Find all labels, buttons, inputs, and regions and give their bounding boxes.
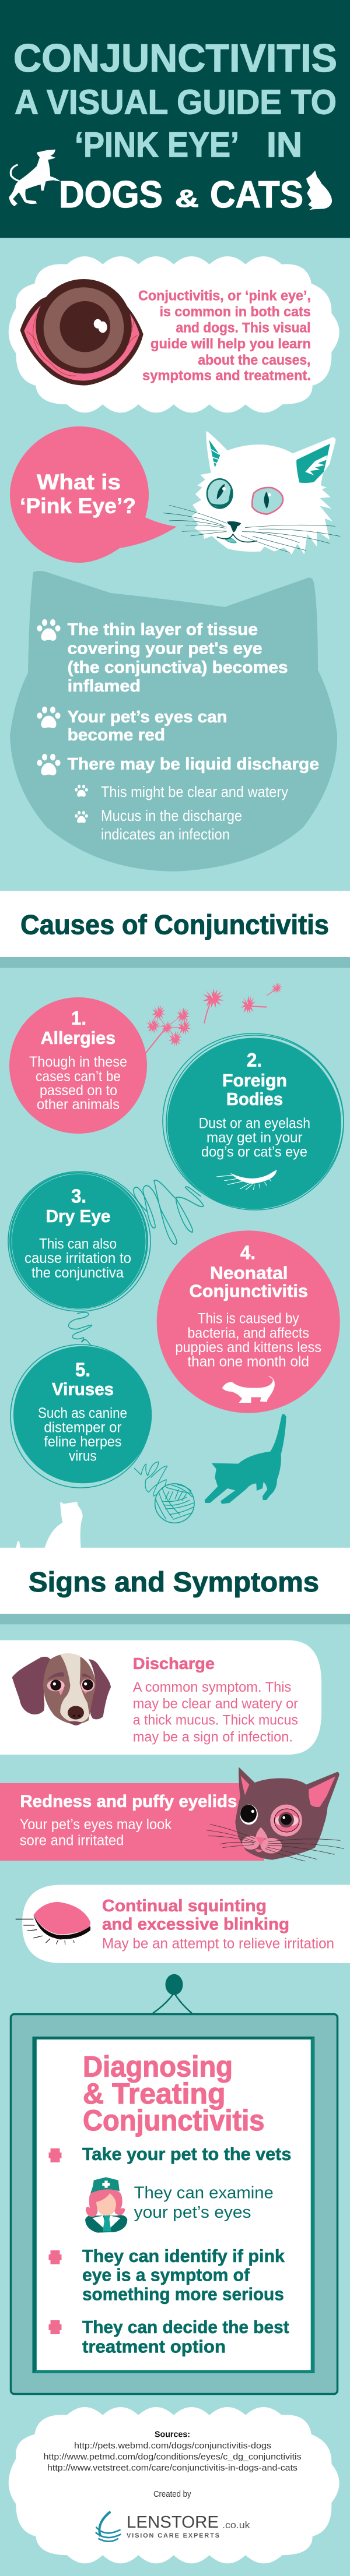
panel: discharge [0, 1640, 321, 1755]
sub-bullet text [101, 783, 288, 843]
bullet text: Your pet’s eyes can [68, 708, 228, 726]
sources text: Sources: [155, 2429, 190, 2440]
circle: 2 Foreign Bodies: Foreign [222, 1070, 287, 1091]
treatment list: They can identify if pink [82, 2246, 285, 2266]
title: A VISUAL GUIDE TO [15, 83, 337, 121]
examine text [134, 2184, 274, 2222]
discharge text: may be clear and watery or [133, 1696, 298, 1712]
frame heading: & Treating [83, 2077, 225, 2110]
circle: 5 Viruses [10, 1345, 152, 1488]
circle: 1 Allergies: 1. [71, 1007, 86, 1029]
icon: dog face [12, 1653, 111, 1725]
circle: 3 Dry Eye: This can also [39, 1236, 117, 1252]
icon: squinting eye [16, 1902, 90, 1945]
circle: 4 Neonatal Conjunctivitis: Conjunctivitis [189, 1280, 308, 1301]
examine text: your pet’s eyes [134, 2203, 251, 2222]
title: CATS [210, 173, 303, 216]
circle: 1 Allergies: passed on to [40, 1082, 117, 1099]
discharge text: a thick mucus. Thick mucus [133, 1713, 298, 1728]
icon: kitten with ball of yarn [134, 1414, 286, 1523]
picture frame hanger [153, 1974, 192, 2013]
redness text: Redness and puffy eyelids [20, 1792, 237, 1811]
frame heading [83, 2051, 265, 2137]
intro text: about the causes, [198, 352, 310, 368]
squinting text [102, 1897, 334, 1952]
circle: 4 Neonatal Conjunctivitis: This is caused by [198, 1311, 299, 1327]
title: & [175, 185, 199, 212]
redness text: Your pet’s eyes may look [20, 1816, 172, 1833]
icon: white cat peeking [16, 1502, 83, 1548]
bullet text: become red [68, 726, 165, 744]
frame heading: Conjunctivitis [83, 2104, 265, 2137]
circle: 5 Viruses: Viruses [52, 1379, 114, 1399]
bullet text: covering your pet's eye [68, 640, 262, 658]
treatment list: treatment option [82, 2336, 226, 2357]
icon: dog silhouette [9, 150, 61, 206]
intro text [138, 288, 311, 384]
circle: 2 Foreign Bodies: Bodies [226, 1089, 283, 1109]
logo: Lenstore: LENSTORE [127, 2513, 219, 2532]
squinting text: May be an attempt to relieve irritation [102, 1936, 334, 1952]
panel: cat-shaped facts [10, 571, 337, 871]
icon: eyelash [216, 1170, 276, 1190]
icon: vet nurse [85, 2177, 127, 2233]
discharge text: A common symptom. This [133, 1679, 291, 1695]
panel: sources cloud [9, 2407, 340, 2563]
circle: 5 Viruses: virus [69, 1448, 97, 1465]
intro text: is common in both cats [160, 304, 311, 320]
bullet text: inflamed [68, 677, 141, 696]
treatment list: something more serious [82, 2284, 284, 2305]
sources text: http://www.petmd.com/dog/conditions/eyes/c_dg_conjunctivitis [44, 2452, 302, 2462]
redness text: sore and irritated [20, 1833, 124, 1849]
treatment list [82, 2144, 291, 2357]
circle: 3 Dry Eye [8, 1171, 150, 1311]
circle: 4 Neonatal Conjunctivitis: 4. [240, 1242, 256, 1264]
sources text: http://pets.webmd.com/dogs/conjunctivitis-dogs [74, 2441, 271, 2451]
intro text: Conjuctivitis, or ‘pink eye’, [138, 288, 311, 304]
panel: redness and puffy eyelids [0, 1767, 344, 1861]
circle: 2 Foreign Bodies: 2. [247, 1049, 262, 1071]
treatment list: eye is a symptom of [82, 2265, 250, 2285]
title [13, 36, 337, 216]
intro text: guide will help you learn [150, 336, 311, 352]
title: ‘PINK EYE’ [75, 125, 239, 164]
examine text: They can examine [134, 2184, 274, 2203]
title: CONJUNCTIVITIS [13, 36, 337, 80]
squinting text: and excessive blinking [102, 1915, 289, 1934]
circle: 1 Allergies: other animals [37, 1096, 120, 1113]
circle: 4 Neonatal Conjunctivitis: puppies and kittens less [175, 1339, 321, 1356]
circle: 3 Dry Eye: the conjunctiva [32, 1265, 124, 1281]
logo: Lenstore: .co.uk [222, 2519, 250, 2531]
circle: 3 Dry Eye: cause irritation to [24, 1250, 131, 1266]
sources text [44, 2429, 302, 2499]
icon: tangled thread between circles [134, 1180, 204, 1244]
circle: 1 Allergies [9, 997, 147, 1134]
circle: 3 Dry Eye: Dry Eye [46, 1206, 111, 1226]
squinting text: Continual squinting [102, 1897, 267, 1915]
sources text: http://www.vetstreet.com/care/conjunctivitis-in-dogs-and-cats [47, 2463, 298, 2473]
icon: white cat head [163, 431, 340, 555]
heading band: signs and symptoms: Signs and Symptoms [29, 1567, 319, 1598]
bullet text [68, 620, 319, 774]
sub-bullet text: Mucus in the discharge [101, 807, 242, 824]
discharge text: may be a sign of infection. [133, 1730, 293, 1745]
bullet text: (the conjunctiva) becomes [68, 658, 288, 677]
intro text: symptoms and treatment. [142, 368, 311, 384]
icon: inflamed eye [20, 279, 144, 386]
circle: 5 Viruses: distemper or [44, 1420, 121, 1436]
icon: thread between circles 3 and 5 [69, 1312, 92, 1346]
header panel [0, 0, 350, 238]
panel: intro cloud [9, 256, 340, 412]
bullet text: The thin layer of tissue [68, 620, 258, 639]
icon: paw bullets [37, 619, 88, 823]
icon: dachshund puppy [222, 1376, 275, 1403]
circle: 5 Viruses: 5. [75, 1359, 90, 1381]
circle: 1 Allergies: cases can’t be [36, 1068, 121, 1085]
panel: diagnosing and treating frame [10, 2014, 337, 2394]
discharge text [133, 1654, 298, 1745]
sources text: Created by [153, 2490, 191, 2499]
panel: squinting and blinking [16, 1885, 350, 1963]
frame heading: Diagnosing [83, 2051, 233, 2083]
icon: plus bullets [49, 2148, 62, 2334]
speech bubble: What is Pink Eye: ‘Pink Eye’? [20, 494, 136, 518]
discharge text: Discharge [133, 1654, 215, 1672]
logo: Lenstore: VISION CARE EXPERTS [127, 2532, 219, 2539]
circle: 1 Allergies: Though in these [29, 1054, 127, 1070]
circle: 5 Viruses: feline herpes [44, 1434, 121, 1450]
intro text: and dogs. This visual [176, 320, 310, 336]
icon: dandelion [145, 982, 282, 1053]
speech bubble: What is Pink Eye: What is [37, 470, 121, 494]
circle: 4 Neonatal Conjunctivitis [157, 1230, 340, 1413]
circle: 2 Foreign Bodies: may get in your [206, 1130, 302, 1146]
circle: 2 Foreign Bodies [163, 1033, 344, 1210]
heading band: causes: Causes of Conjunctivitis [20, 909, 329, 940]
circle: 4 Neonatal Conjunctivitis: Neonatal [210, 1263, 288, 1283]
title: DOGS [59, 173, 163, 216]
treatment list: Take your pet to the vets [82, 2144, 291, 2164]
title: IN [267, 125, 302, 164]
icon: sick cat head [206, 1767, 344, 1861]
circle: 3 Dry Eye: 3. [71, 1185, 86, 1207]
circle: 5 Viruses: Such as canine [38, 1405, 127, 1421]
sub-bullet text: This might be clear and watery [101, 783, 288, 800]
circle: 1 Allergies: Allergies [41, 1028, 116, 1048]
heading band: causes [0, 891, 350, 968]
circle: 4 Neonatal Conjunctivitis: than one month old [187, 1353, 309, 1370]
icon: cat silhouette [306, 171, 332, 210]
heading band: signs and symptoms [0, 1548, 350, 1624]
redness text [20, 1792, 237, 1849]
circle: 4 Neonatal Conjunctivitis: bacteria, and affects [187, 1325, 309, 1342]
speech bubble: What is Pink Eye [10, 426, 177, 563]
bullet text: There may be liquid discharge [68, 755, 319, 774]
circle: 2 Foreign Bodies: dog’s or cat’s eye [201, 1144, 307, 1160]
logo: Lenstore [96, 2512, 250, 2542]
sub-bullet text: indicates an infection [101, 825, 230, 843]
treatment list: They can decide the best [82, 2317, 289, 2337]
circle: 2 Foreign Bodies: Dust or an eyelash [199, 1116, 310, 1132]
